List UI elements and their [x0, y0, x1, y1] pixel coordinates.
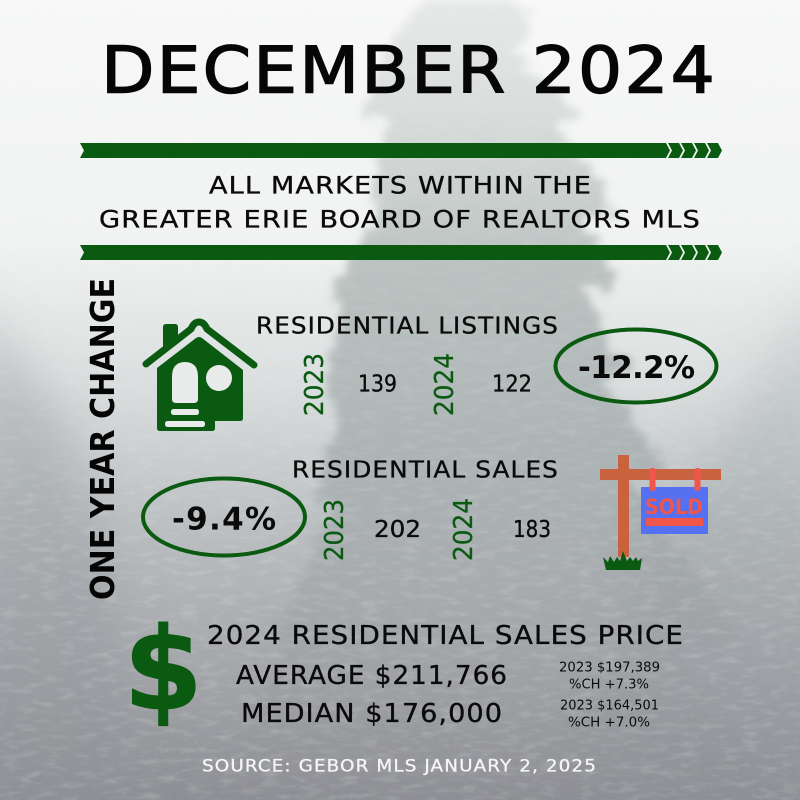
- heading: residential listings: RESIDENTIAL LISTINGS: [256, 314, 559, 340]
- icon: dollar sign: $: [124, 603, 203, 736]
- callout: listings change: [556, 330, 716, 402]
- stat: sales 2024: 183: [513, 517, 551, 543]
- subtitle: ALL MARKETS WITHIN THE: [209, 172, 592, 200]
- callout: sales change: [143, 478, 305, 556]
- source line: SOURCE: GEBOR MLS JANUARY 2, 2025: [202, 756, 597, 776]
- stat: listings 2023: [300, 353, 397, 416]
- callout: sales change: -9.4%: [172, 502, 276, 538]
- stat: listings 2024: 2024: [430, 353, 460, 416]
- vertical label: one year change: ONE YEAR CHANGE: [83, 278, 122, 600]
- icon: sold sign: [600, 455, 721, 570]
- subtitle: GREATER ERIE BOARD OF REALTORS MLS: [99, 206, 701, 234]
- note: median comparison: %CH +7.0%: [568, 714, 650, 730]
- stat: listings 2024: 122: [492, 372, 532, 398]
- stat: sales 2024: [449, 498, 551, 561]
- icon: sold sign: SOLD: [645, 495, 703, 519]
- note: average comparison: %CH +7.3%: [569, 676, 649, 692]
- note: average comparison: 2023 $197,389: [559, 660, 660, 676]
- icon: house: [146, 322, 254, 431]
- banner: lower arrow bar: [80, 245, 722, 260]
- subtitle: [99, 172, 701, 234]
- callout: listings change: -12.2%: [578, 350, 695, 386]
- stat: listings 2023: 139: [358, 372, 397, 398]
- title: DECEMBER 2024: [101, 34, 717, 108]
- stat: average price: AVERAGE $211,766: [236, 661, 508, 691]
- stat: sales 2023: 2023: [320, 499, 350, 561]
- stat: listings 2023: 2023: [300, 353, 330, 416]
- heading: residential sales: RESIDENTIAL SALES: [292, 458, 559, 484]
- note: median comparison: [560, 698, 659, 730]
- heading: sales price: 2024 RESIDENTIAL SALES PRICE: [207, 621, 684, 651]
- stat: median price: MEDIAN $176,000: [241, 699, 503, 729]
- note: median comparison: 2023 $164,501: [560, 698, 659, 714]
- stat: sales 2023: 202: [374, 517, 421, 543]
- stat: sales 2023: [320, 499, 421, 561]
- stat: listings 2024: [430, 353, 532, 416]
- banner: top arrow bar: [80, 143, 722, 158]
- stat: sales 2024: 2024: [449, 498, 479, 561]
- note: average comparison: [559, 660, 660, 692]
